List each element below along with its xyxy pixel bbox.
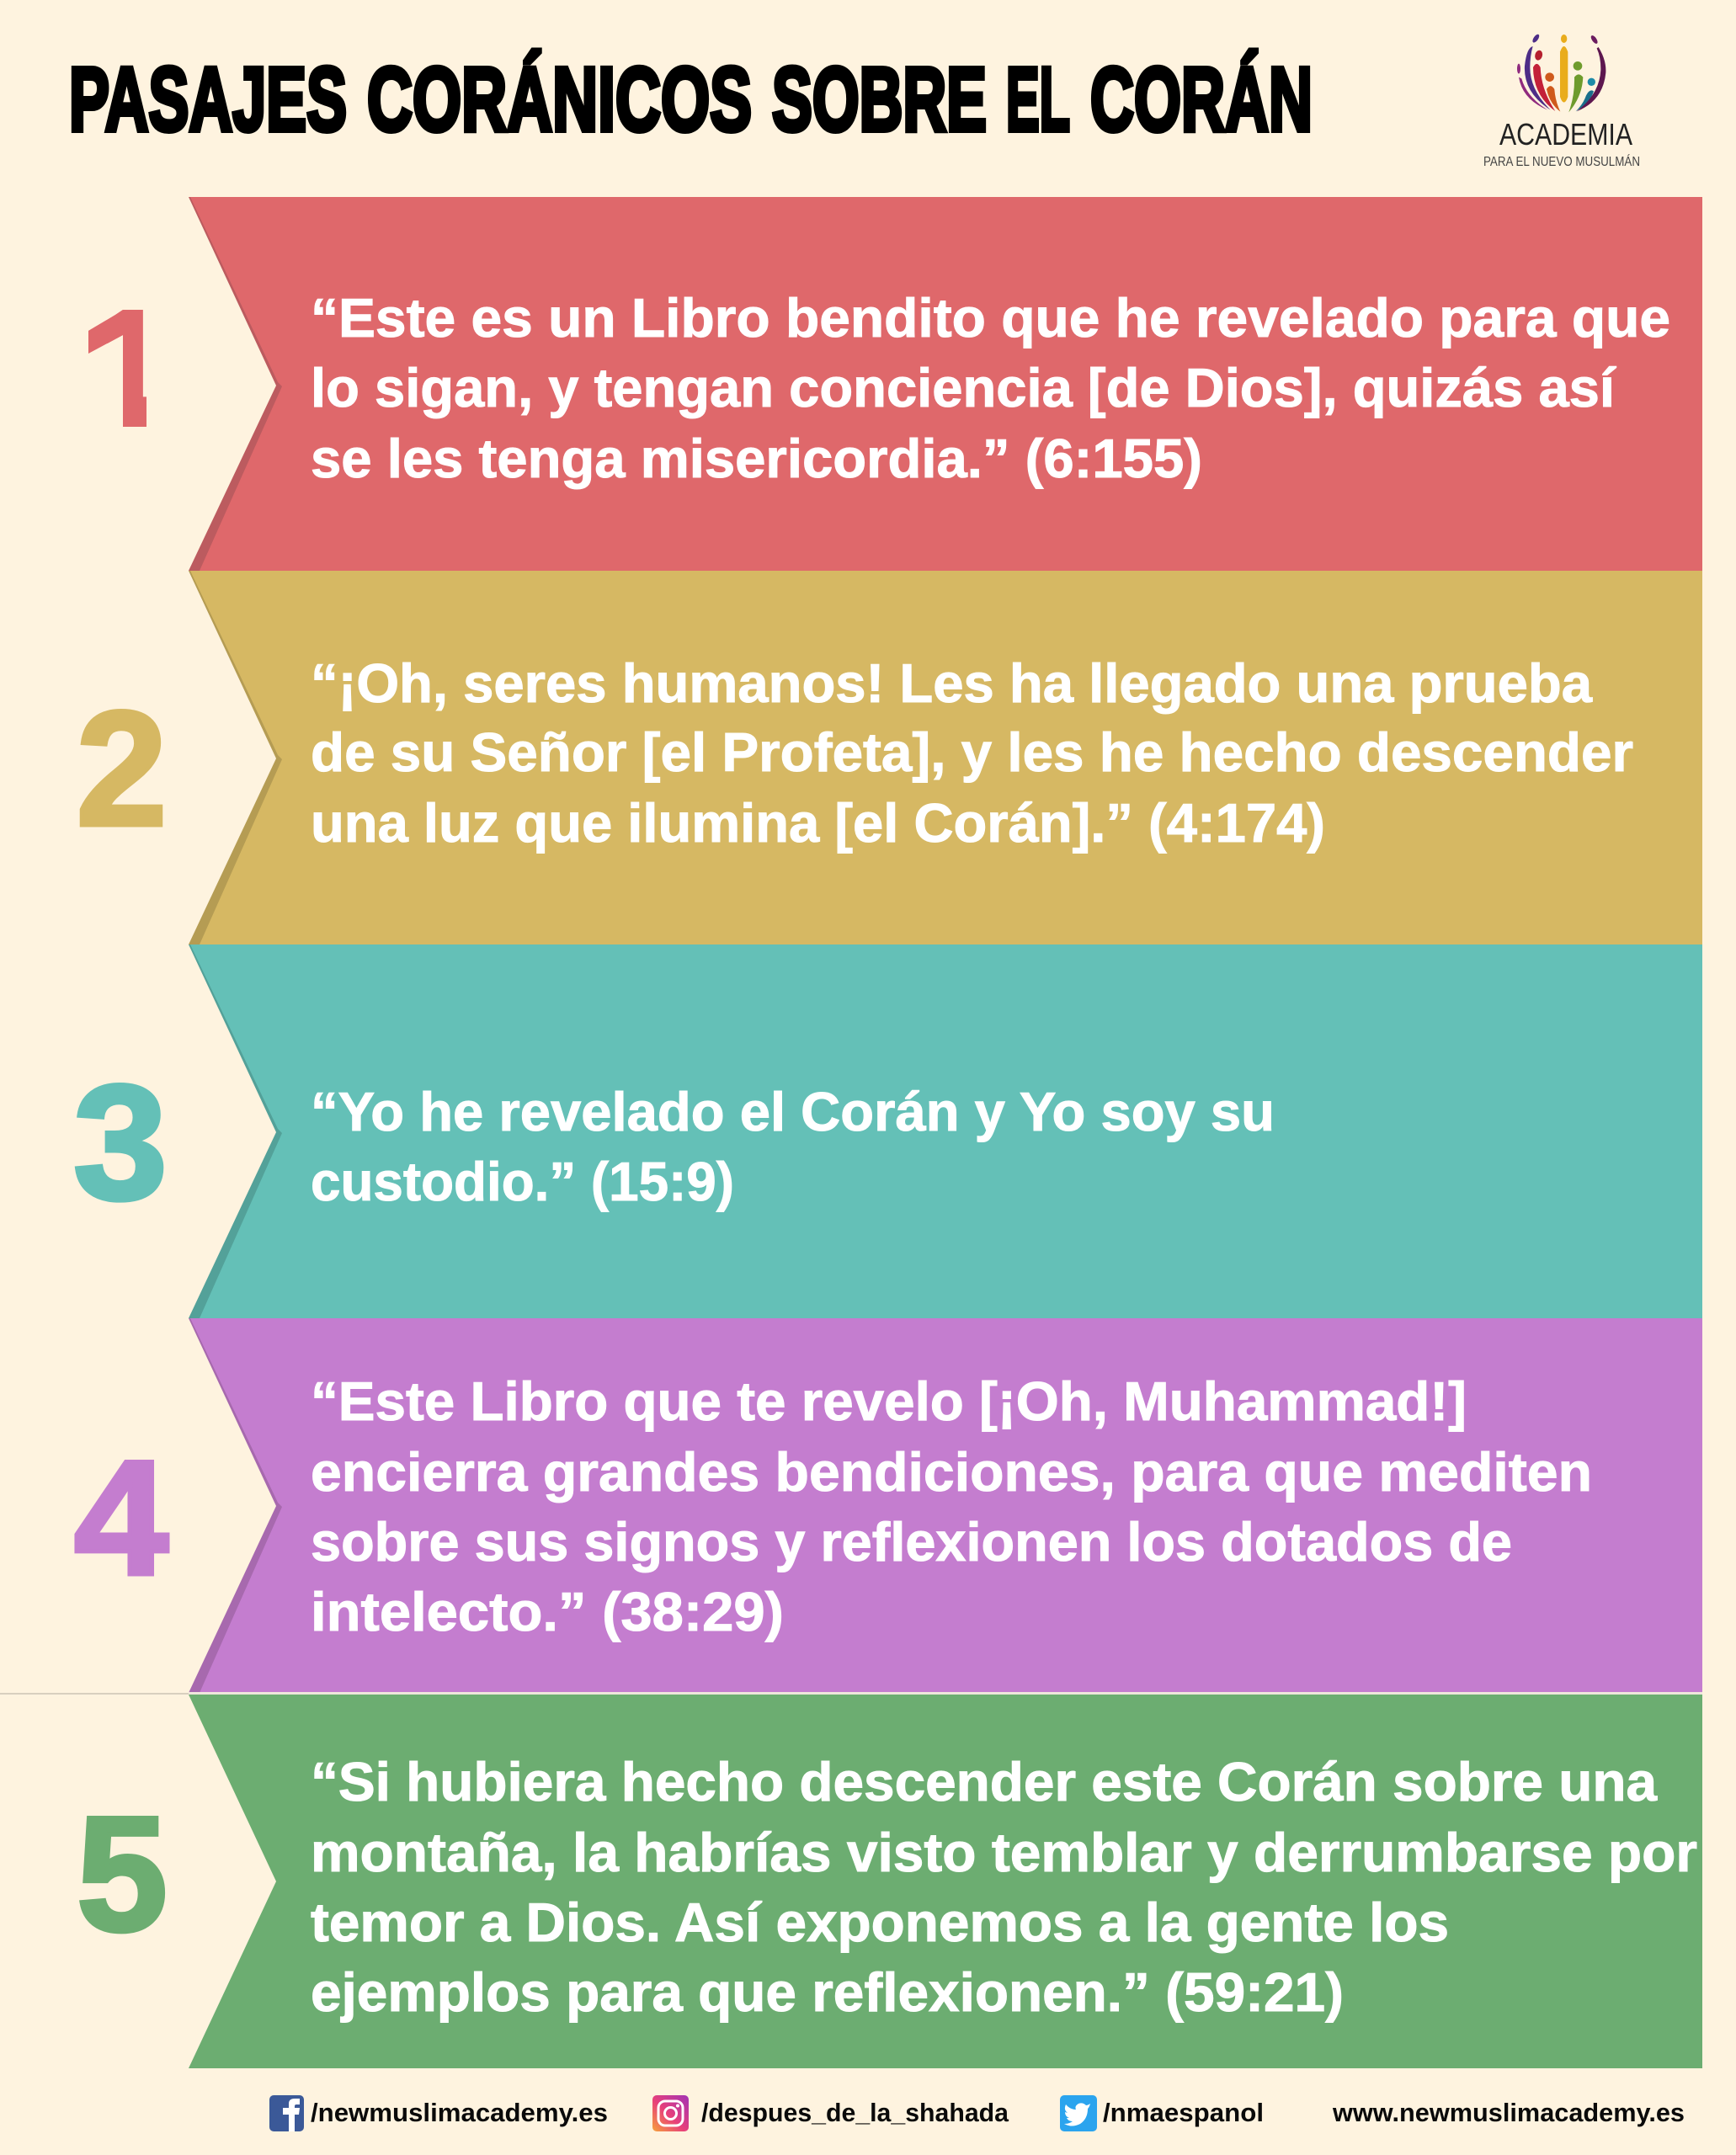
quote 1: “Este es un Libro bendito que he revelado para que <box>311 287 1670 349</box>
quote 4: sobre sus signos y reflexionen los dotados de <box>311 1511 1512 1572</box>
panel 4: purple <box>74 1318 1702 1693</box>
title: CORÁN <box>1090 48 1313 150</box>
quote 5: ejemplos para que reflexionen.” (59:21) <box>311 1961 1344 2023</box>
title: EL <box>1006 48 1070 150</box>
quote 5: “Si hubiera hecho descender este Corán sobre una <box>311 1751 1658 1812</box>
number 3: 3 <box>73 1051 168 1234</box>
title: SOBRE <box>772 48 987 150</box>
facebook handle: /newmuslimacademy.es <box>311 2098 608 2127</box>
icon: figures emblem <box>1517 33 1606 112</box>
quote 5 <box>311 1751 1697 2023</box>
icon: twitter <box>1060 2095 1097 2131</box>
quote 4: intelecto.” (38:29) <box>311 1581 784 1642</box>
number 2: 2 <box>76 678 167 860</box>
website: www.newmuslimacademy.es <box>1332 2098 1685 2127</box>
number 4: 4 <box>74 1427 168 1610</box>
quote 2: de su Señor [el Profeta], y les he hecho descender <box>311 721 1633 783</box>
panel 2: gold <box>76 571 1702 944</box>
icon: facebook <box>269 2095 304 2131</box>
title: CORÁNICOS <box>367 48 752 150</box>
quote 4: “Este Libro que te revelo [¡Oh, Muhammad!] <box>311 1370 1467 1432</box>
quote 3: “Yo he revelado el Corán y Yo soy su <box>311 1081 1275 1142</box>
quote 1: lo sigan, y tengan conciencia [de Dios], quizás así <box>311 357 1616 418</box>
panel 1: red <box>67 197 1702 571</box>
instagram handle: /despues_de_la_shahada <box>701 2098 1009 2127</box>
panel 3: teal <box>73 944 1702 1318</box>
title: PASAJES <box>69 48 347 150</box>
quote 1 <box>311 287 1670 489</box>
panel 5: green <box>77 1695 1702 2068</box>
quote 2 <box>311 652 1633 854</box>
number 1: 1 <box>67 273 162 463</box>
quote 5: montaña, la habrías visto temblar y derrumbarse por <box>311 1822 1697 1883</box>
quote 1: se les tenga misericordia.” (6:155) <box>311 428 1202 489</box>
quote 2: una luz que ilumina [el Corán].” (4:174) <box>311 792 1325 854</box>
quote 3: custodio.” (15:9) <box>311 1151 734 1212</box>
title <box>69 48 1313 150</box>
twitter handle: /nmaespanol <box>1103 2098 1264 2127</box>
number 5: 5 <box>77 1783 168 1966</box>
logo tagline: PARA EL NUEVO MUSULMÁN <box>1483 155 1640 169</box>
icon: instagram <box>652 2095 689 2131</box>
logo: Academia para el nuevo musulmán <box>1483 33 1640 169</box>
quote 4: encierra grandes bendiciones, para que mediten <box>311 1441 1592 1503</box>
quote 2: “¡Oh, seres humanos! Les ha llegado una prueba <box>311 652 1593 714</box>
logo wordmark: ACADEMIA <box>1499 117 1632 152</box>
quote 5: temor a Dios. Así exponemos a la gente los <box>311 1892 1449 1953</box>
footer: social links <box>269 2095 1685 2131</box>
quote 3 <box>311 1081 1275 1212</box>
quote 4 <box>311 1370 1592 1642</box>
